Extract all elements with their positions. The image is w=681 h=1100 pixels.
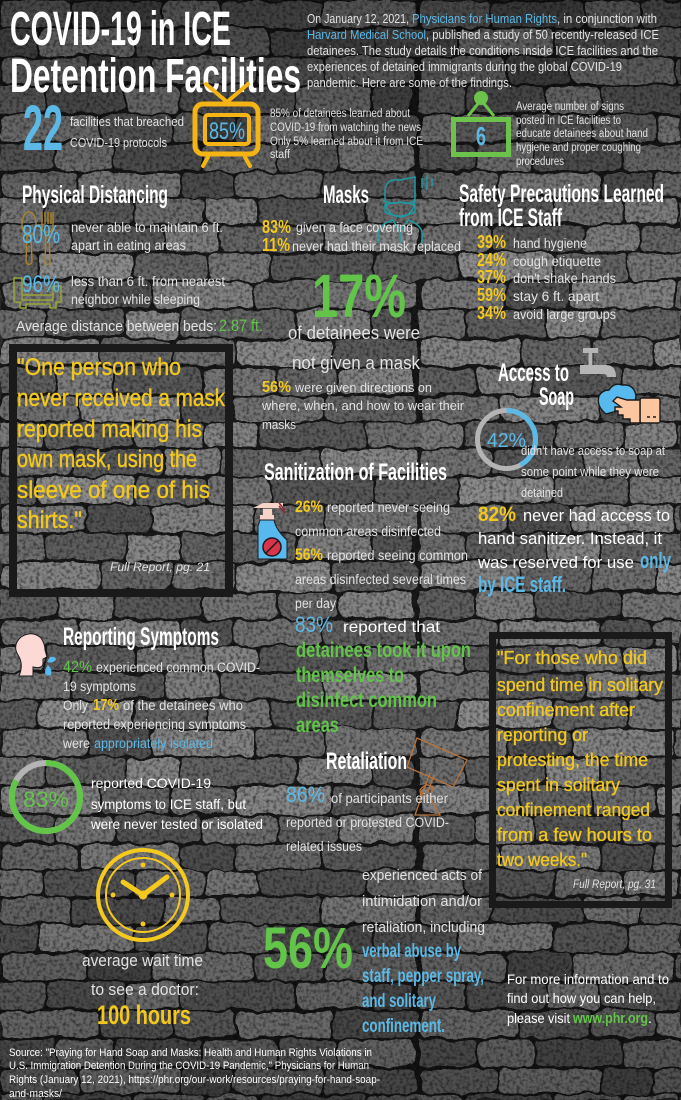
panel: safety precautions <box>459 180 664 323</box>
icon: coughing head <box>16 634 56 676</box>
text: no soap: some point while they were <box>521 465 659 479</box>
panel: wait time <box>82 850 203 1030</box>
text: intimidation: retaliation, including <box>362 920 485 936</box>
stat: 56%: 56% <box>263 916 353 981</box>
source citation <box>9 1047 380 1100</box>
stat: 80%: 80% <box>22 219 60 249</box>
list: precautions: 39% <box>477 232 506 252</box>
quote box: one person: shirts." <box>17 507 82 534</box>
text: eating areas: apart in eating areas <box>71 238 186 253</box>
text: symptoms: 19 symptoms <box>63 679 136 694</box>
text: given a covering: given a face covering <box>296 220 413 235</box>
text: intimidation <box>362 868 485 936</box>
quote box: solitary confinement: "For those who did <box>497 647 647 668</box>
text: eating areas: never able to maintain 6 ft. <box>71 220 223 235</box>
text: sleeping distance <box>71 274 225 307</box>
quote box: solitary confinement: confinement after <box>497 699 635 720</box>
text: not given a mask: of detainees were <box>288 323 420 343</box>
callout: more information: please visit <box>507 1010 570 1026</box>
text: abuse types <box>362 941 484 1037</box>
text: news source: Only 5% learned about it from ICE <box>270 136 423 148</box>
text: directions: were given directions on <box>294 380 432 395</box>
heading: reporting symptoms: Reporting Symptoms <box>63 623 219 651</box>
list: precautions: 59% <box>477 285 506 305</box>
title: COVID-19 in ICE <box>10 3 231 56</box>
text: eating areas <box>71 220 223 253</box>
text: detainees disinfected: detainees took it upon <box>296 639 471 662</box>
quote box: one person: sleeve of one of his <box>17 477 210 504</box>
text: abuse types: and solitary <box>362 991 436 1012</box>
text: symptoms: 17% <box>93 697 119 714</box>
text: hand sanitizer: hand sanitizer. Instead, it <box>478 529 662 548</box>
stat: 17%: 17% <box>312 262 406 330</box>
source citation: Source: "Praying for Hand Soap and Masks: Health and Human Rights Violations in <box>9 1047 372 1059</box>
text: symptoms <box>62 659 260 751</box>
text: signs posted <box>516 101 648 168</box>
text: disinfection: 56% <box>295 545 323 564</box>
quote box: solitary confinement: spend time in solitary <box>497 674 664 695</box>
quote box: solitary confinement: Full Report, pg. 31 <box>573 877 656 891</box>
list: precautions: 34% <box>477 303 506 323</box>
quote box: solitary confinement: reporting or <box>497 724 588 745</box>
icon: sign with 6 <box>454 91 508 154</box>
text: disinfection: 26% <box>295 497 323 516</box>
heading: masks: Masks <box>323 181 369 209</box>
text: detainees disinfected: reported that <box>343 619 441 636</box>
intro paragraph: Harvard Medical School <box>307 27 426 42</box>
text: abuse types: verbal abuse by <box>362 941 461 962</box>
text: signs posted: hygiene and proper coughing <box>516 142 641 154</box>
callout: more information: find out how you can help, <box>507 990 656 1006</box>
quote box: solitary confinement <box>492 636 668 904</box>
heading: access to soap: Access to <box>498 359 569 387</box>
text: given a covering: 11% <box>262 235 290 255</box>
panel: access to soap <box>477 348 672 597</box>
text: disinfection: reported never seeing <box>327 500 450 515</box>
list: precautions: cough etiquette <box>513 254 601 269</box>
text: disinfection: per day <box>295 596 336 611</box>
chart: 83% ring <box>12 763 80 831</box>
text: average wait <box>82 951 203 999</box>
text: no soap <box>521 444 665 500</box>
text: abuse types: confinement. <box>362 1016 445 1037</box>
stat: 22 facilities: facilities that breached <box>70 115 184 129</box>
panel: masks <box>261 175 465 432</box>
intro paragraph: experiences of detained immigrants during the global COVID-19 <box>307 59 622 74</box>
text: signs posted: posted in ICE facilities to <box>516 115 621 127</box>
text: average distance: 2.87 ft. <box>219 316 263 335</box>
quote box: solitary confinement: confinement ranged <box>497 799 650 820</box>
chart: 83% ring: 83% <box>23 787 69 812</box>
icon: television with 85% <box>195 84 258 166</box>
list: precautions <box>477 232 616 323</box>
chart: 42% ring: 42% <box>487 430 526 452</box>
text: symptoms: reported experiencing symptoms <box>63 717 246 732</box>
text: symptoms: of the detainees who <box>123 698 243 713</box>
text: no soap: detained <box>521 486 563 500</box>
panel: physical distancing <box>14 181 263 335</box>
list: precautions: hand hygiene <box>513 236 587 251</box>
text: reported or protested: 86% <box>286 782 325 807</box>
icon: faucet <box>580 348 616 377</box>
icon: masked person <box>378 175 432 243</box>
text: sleeping distance: neighbor while sleeping <box>71 292 200 307</box>
text: reported or protested: related issues <box>286 839 362 854</box>
quote box: one person: reported making his <box>17 416 202 443</box>
panel: sanitization <box>253 459 471 737</box>
text: detainees disinfected: disinfect common <box>296 689 437 712</box>
callout: more information: www.phr.org <box>572 1010 648 1027</box>
text: never tested: were never tested or isolated <box>90 816 263 832</box>
heading: access to soap: Soap <box>539 383 574 411</box>
quote box: solitary confinement: spent in solitary <box>497 774 621 795</box>
text: news source <box>270 108 423 161</box>
quote box: one person <box>13 348 229 593</box>
chart: 42% ring <box>478 410 536 468</box>
text: never tested: reported COVID-19 <box>91 775 211 791</box>
intro paragraph: , in conjunction with <box>557 11 657 26</box>
stat: 22 facilities: 22 <box>23 92 63 164</box>
icon: sign with 6: 6 <box>476 121 486 151</box>
text: disinfection: common areas disinfected <box>295 524 441 539</box>
text: detainees disinfected: 83% <box>295 612 333 637</box>
intro paragraph: Physicians for Human Rights <box>412 11 557 26</box>
text: never tested <box>90 775 263 832</box>
icon: bed <box>14 278 61 308</box>
source citation: and-masks/ <box>9 1088 63 1100</box>
text: signs posted: educate detainees about hand <box>516 128 648 140</box>
stat: 96%: 96% <box>22 271 60 298</box>
text: symptoms: experienced common COVID- <box>96 660 260 675</box>
stat: 22 facilities <box>23 92 184 164</box>
heading: safety precautions <box>459 180 664 232</box>
list: precautions: 24% <box>477 250 506 270</box>
text: directions: masks <box>262 417 296 432</box>
text: detainees disinfected <box>295 612 471 737</box>
text: average wait: average wait time <box>82 951 203 970</box>
text: news source: staff <box>270 149 291 161</box>
text: directions: where, when, and how to wear their <box>261 398 465 413</box>
title: Detention Facilities <box>10 50 301 103</box>
list: precautions: 37% <box>477 267 506 287</box>
icon: spray bottle <box>253 503 287 559</box>
text: signs posted: procedures <box>516 156 564 168</box>
callout: more information: . <box>648 1010 652 1026</box>
stat: 22 facilities: COVID-19 protocols <box>70 136 167 150</box>
list: precautions: avoid large groups <box>513 307 616 322</box>
icon: protest sign <box>407 738 467 815</box>
list: precautions: don't shake hands <box>513 271 616 286</box>
heading: access to soap <box>498 359 574 411</box>
icon: television with 85%: 85% <box>209 118 245 145</box>
stat: 100 hours: 100 hours <box>97 1000 191 1030</box>
text: abuse types: staff, pepper spray, <box>362 966 484 987</box>
text: directions: 56% <box>262 379 291 396</box>
source citation: Rights (January 12, 2021), https://phr.org/our-work/resources/praying-for-hand-soap- <box>9 1074 380 1086</box>
text: directions <box>261 379 465 432</box>
text: hand sanitizer <box>477 503 672 597</box>
callout: more information <box>507 971 669 1027</box>
text: detainees disinfected: areas <box>296 714 339 737</box>
callout: more information: For more information and to <box>507 971 669 987</box>
text: given a covering: never had their mask replaced <box>292 239 461 254</box>
quote box: solitary confinement: two weeks." <box>497 849 587 870</box>
text: news source: 85% of detainees learned about <box>270 108 411 120</box>
quote box: one person: "One person who <box>17 354 181 381</box>
text: news source: COVID-19 from watching the news <box>270 122 421 134</box>
icon: clock <box>98 850 188 940</box>
list: precautions: stay 6 ft. apart <box>513 289 599 304</box>
text: reported or protested: reported or protested COVID- <box>286 815 449 830</box>
heading: retaliation: Retaliation <box>326 748 407 775</box>
source citation: U.S. Immigration Detention During the COVID-19 Pandemic," Physicians for Human <box>9 1060 369 1072</box>
text: intimidation: intimidation and/or <box>362 894 482 910</box>
text: disinfection: reported seeing common <box>327 548 468 563</box>
text: given a covering: 83% <box>262 217 291 237</box>
text: sleeping distance: less than 6 ft. from nearest <box>71 274 225 289</box>
text: disinfection: areas disinfected several times <box>295 572 466 587</box>
text: signs posted: Average number of signs <box>516 101 624 113</box>
text: average wait: to see a doctor: <box>91 980 199 999</box>
heading: physical distancing: Physical Distancing <box>22 181 168 209</box>
text: symptoms: Only <box>63 698 88 713</box>
icon: soap and hand <box>598 384 660 423</box>
text: never tested: symptoms to ICE staff, but <box>91 796 246 812</box>
text: hand sanitizer: 82% <box>478 503 516 526</box>
text: hand sanitizer: never had access to <box>523 506 670 525</box>
text: disinfection <box>295 497 468 611</box>
quote box: solitary confinement: from a few hours to <box>497 824 652 845</box>
panel: retaliation <box>263 738 485 1037</box>
text: intimidation: experienced acts of <box>362 868 483 884</box>
text: not given a mask <box>288 323 421 373</box>
text: hand sanitizer: by ICE staff. <box>478 572 566 597</box>
quote box: one person: never received a mask <box>17 385 226 412</box>
heading: sanitization: Sanitization of Facilities <box>264 459 447 486</box>
quote box: solitary confinement: protesting, the time <box>497 749 648 770</box>
text: reported or protested: of participants either <box>331 791 448 806</box>
quote box: one person: Full Report, pg. 21 <box>110 560 210 574</box>
quote box: one person: own mask, using the <box>17 446 197 473</box>
text: symptoms: were <box>62 736 90 751</box>
text: symptoms: appropriately isolated <box>94 736 213 751</box>
text: hand sanitizer: was reserved for use <box>477 553 634 572</box>
heading: safety precautions: from ICE Staff <box>459 204 562 232</box>
text: reported or protested <box>286 782 449 854</box>
text: given a covering <box>262 217 461 255</box>
text: average distance: Average distance between beds: <box>16 318 217 335</box>
intro paragraph: On January 12, 2021, <box>307 11 409 26</box>
intro paragraph: pandemic. Here are some of the findings. <box>307 75 512 90</box>
text: no soap: didn't have access to soap at <box>521 444 665 458</box>
panel: reporting symptoms <box>12 623 263 832</box>
text: not given a mask: not given a mask <box>292 353 421 373</box>
text: symptoms: 42% <box>63 659 92 676</box>
text: detainees disinfected: themselves to <box>296 664 404 687</box>
intro paragraph <box>307 11 659 90</box>
icon: cutlery <box>22 212 53 264</box>
title <box>10 3 301 103</box>
